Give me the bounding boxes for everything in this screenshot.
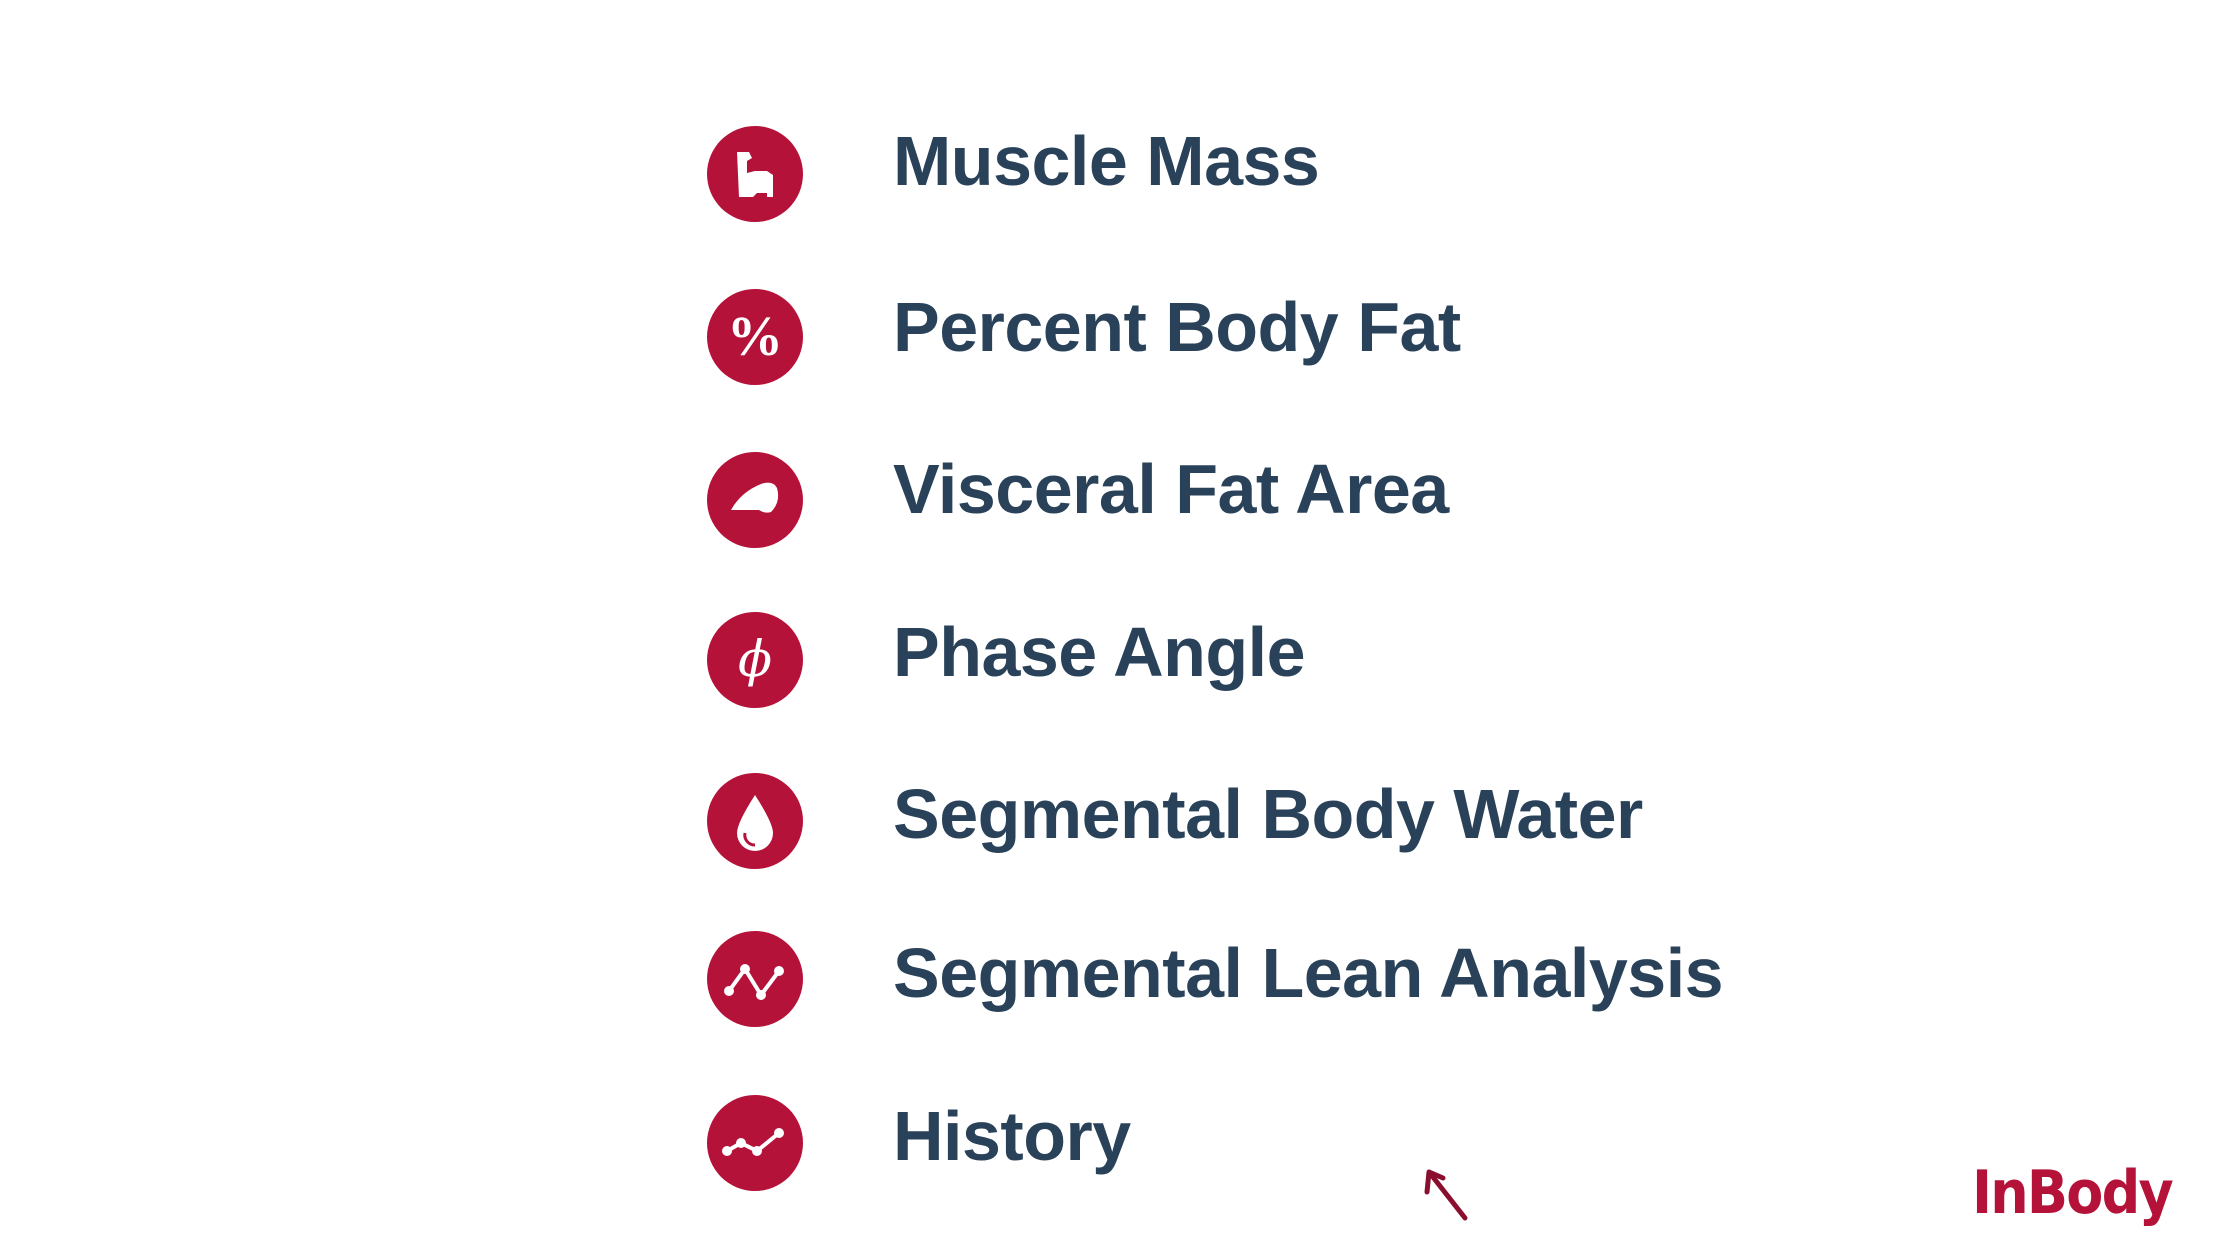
icon: phi <box>707 612 803 708</box>
logo: InBody: InBody <box>1972 1158 2172 1228</box>
row: percent body fat <box>707 288 1461 385</box>
row: segmental lean <box>707 931 1723 1027</box>
icon: phi: ϕ <box>738 630 772 688</box>
icon: water drop <box>707 773 803 869</box>
icon: visceral organ <box>707 452 803 548</box>
text: Muscle Mass <box>893 122 1319 200</box>
text: Percent Body Fat <box>893 288 1461 366</box>
text: Phase Angle <box>893 613 1305 691</box>
cursor arrow <box>1424 1170 1468 1220</box>
row: phase angle <box>707 612 1305 708</box>
row: history <box>707 1095 1131 1191</box>
row: muscle mass <box>707 122 1319 222</box>
row: visceral fat <box>707 450 1450 548</box>
icon: percent <box>707 289 803 385</box>
icon: history graph <box>707 1095 803 1191</box>
row: segmental body water <box>707 773 1643 869</box>
text: Segmental Lean Analysis <box>893 934 1723 1012</box>
text: Segmental Body Water <box>893 775 1643 853</box>
text: Visceral Fat Area <box>893 450 1449 528</box>
icon: percent: % <box>727 306 783 368</box>
text: History <box>893 1097 1131 1175</box>
icon: muscle arm <box>707 126 803 222</box>
icon: line nodes <box>707 931 803 1027</box>
